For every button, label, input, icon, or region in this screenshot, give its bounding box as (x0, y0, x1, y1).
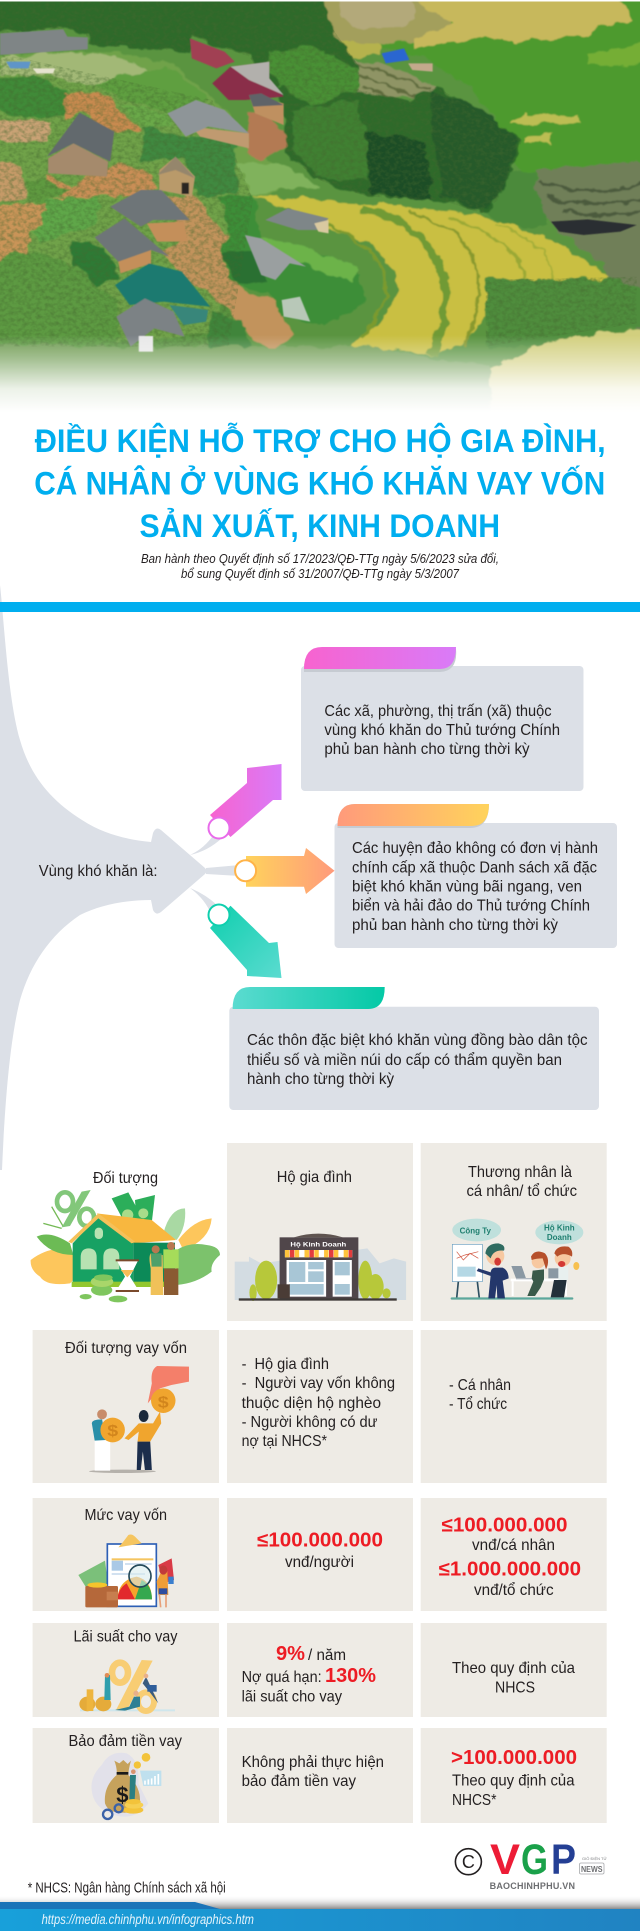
VGP logo: BAOCHINHPHU.VN (490, 1881, 575, 1891)
panel: huyện đảo: biển và hải đảo do Thủ tướng Chính (352, 897, 590, 915)
cell: loan recipients, trader: - Tổ chức (449, 1395, 507, 1413)
panel: thôn đặc biệt khó khăn: hành cho từng thời kỳ (247, 1071, 394, 1088)
cell: Không phải thực hiện: Không phải thực hiện (242, 1754, 384, 1771)
cell: ≤100.000.000 vnđ/người: vnđ/người (285, 1554, 354, 1571)
blue divider (0, 602, 640, 612)
icon: business people: Công Ty (460, 1226, 492, 1235)
table row 1: Đối tượng (31, 1170, 220, 1302)
cell: ≤100.000.000 / ≤1.000.000.000: ≤1.000.000.000 (439, 1559, 581, 1581)
cell: Theo quy định của NHCS (421, 1623, 607, 1717)
cell: >100.000.000: NHCS* (452, 1792, 496, 1809)
VGP logo (455, 1836, 607, 1891)
footer URL: https://media.chinhphu.vn/infographics.htm (42, 1912, 254, 1927)
hero photo: terraced rice fields and village (0, 0, 640, 447)
cell: ≤100.000.000 vnđ/người (227, 1498, 413, 1611)
background branching shape (0, 585, 206, 1170)
cell: ≤100.000.000 / ≤1.000.000.000: vnđ/tổ chức (474, 1581, 554, 1599)
cell: >100.000.000: >100.000.000 (451, 1747, 577, 1769)
panel: thôn đặc biệt khó khăn (229, 987, 599, 1110)
white fade at bottom of photo (0, 335, 640, 412)
cell: Lãi suất cho vay: Lãi suất cho vay (74, 1629, 178, 1646)
cell: Bảo đảm tiền vay: Bảo đảm tiền vay (68, 1733, 182, 1750)
icon: people exchanging coins (89, 1366, 189, 1473)
VGP logo: V (490, 1836, 520, 1884)
cell: ≤100.000.000 / ≤1.000.000.000 (421, 1498, 607, 1611)
cell: Không phải thực hiện (227, 1728, 413, 1823)
footnote: * NHCS: Ngân hàng Chính sách xã hội (28, 1881, 226, 1897)
cell: Mức vay vốn (33, 1498, 219, 1611)
icon: business people: Doanh (547, 1233, 572, 1242)
cell: Theo quy định của NHCS: Theo quy định của (452, 1660, 575, 1677)
cell: loan recipients, household: - Người vay vốn không (242, 1375, 395, 1392)
connectors from shape to arrows (190, 834, 240, 914)
VGP logo: P (551, 1836, 576, 1884)
cell: loan recipients, trader (421, 1330, 607, 1483)
panel: xã, phường, thị trấn (301, 647, 584, 791)
subtitle: Ban hành theo Quyết định số 17/2023/QĐ-TTg ngày 5/6/2023 sửa đổi, (141, 551, 499, 566)
icon: clipboard wallet gauge (78, 1534, 174, 1607)
panel: huyện đảo: biệt khó khăn vùng bãi ngang, ven (352, 879, 582, 896)
icon: business people (451, 1219, 583, 1300)
cell: Đối tượng vay vốn: Đối tượng vay vốn (65, 1340, 187, 1357)
cell: loan recipients, household: - Hộ gia đình (242, 1356, 329, 1373)
cell: Lãi suất cho vay (33, 1623, 219, 1717)
cell: Không phải thực hiện: bảo đảm tiền vay (242, 1773, 356, 1790)
cell: Theo quy định của NHCS: NHCS (495, 1680, 535, 1697)
panel: huyện đảo: Các huyện đảo không có đơn vị hành (352, 840, 598, 857)
cell: loan recipients, trader: - Cá nhân (449, 1377, 511, 1394)
cell: >100.000.000 (421, 1728, 607, 1823)
VGP logo: C (462, 1852, 475, 1872)
header cell: Đối tượng: Đối tượng (93, 1170, 158, 1187)
subtitle: bổ sung Quyết định số 31/2007/QĐ-TTg ngày 5/3/2007 (181, 566, 460, 581)
panel: xã, phường, thị trấn: Các xã, phường, thị trấn (xã) thuộc (324, 703, 552, 720)
cell: 9% / năm, nợ quá hạn 130%: / năm (308, 1647, 346, 1664)
cell: Hộ gia đình (227, 1143, 413, 1321)
panel: xã, phường, thị trấn: phủ ban hành cho từng thời kỳ (324, 741, 530, 758)
cell: 9% / năm, nợ quá hạn 130% (227, 1623, 413, 1717)
panel: huyện đảo: chính cấp xã thuộc Danh sách xã đặc (352, 860, 597, 876)
cell: Bảo đảm tiền vay (33, 1728, 219, 1823)
VGP logo: NEWS (581, 1864, 603, 1874)
footer bar (0, 1895, 640, 1931)
subtitle (141, 551, 499, 581)
icon: green house with money (31, 1190, 220, 1302)
arrow: green (208, 904, 282, 978)
panel: huyện đảo (334, 804, 617, 948)
icon: money bag with coins (91, 1753, 161, 1819)
title: SẢN XUẤT, KINH DOANH (140, 508, 500, 544)
cell: Thương nhân: Thương nhân là (468, 1164, 572, 1181)
VGP logo: G (521, 1836, 548, 1884)
cell: Thương nhân (421, 1143, 607, 1321)
icon: business people: Hộ Kinh (544, 1224, 575, 1233)
icon: money bag with coins: $ (116, 1783, 128, 1808)
icon: people exchanging coins: $ (107, 1422, 118, 1440)
tree texture (0, 0, 640, 353)
cell: loan recipients, household: thuộc diện hộ nghèo (242, 1395, 381, 1412)
village houses (0, 29, 637, 352)
cell: ≤100.000.000 / ≤1.000.000.000: ≤100.000.000 (442, 1515, 568, 1537)
title (34, 423, 606, 544)
icon: storefront Hộ Kinh Doanh: Hộ Kinh Doanh (290, 1242, 346, 1248)
arrow: pink (208, 764, 282, 838)
cell: loan recipients, household: - Người không có dư (242, 1414, 378, 1431)
icon: storefront Hộ Kinh Doanh (235, 1234, 406, 1301)
arrow: orange (235, 848, 334, 894)
icon: percent with coin bags (79, 1660, 175, 1711)
panel: thôn đặc biệt khó khăn: thiểu số và miền núi do cấp có thẩm quyền ban (247, 1051, 562, 1069)
cell: Hộ gia đình: Hộ gia đình (277, 1169, 352, 1186)
cell: 9% / năm, nợ quá hạn 130%: 9% (276, 1643, 305, 1665)
cell: 9% / năm, nợ quá hạn 130%: lãi suất cho vay (242, 1689, 342, 1706)
cell: ≤100.000.000 / ≤1.000.000.000: vnđ/cá nhân (472, 1537, 555, 1554)
cell: 9% / năm, nợ quá hạn 130%: Nợ quá hạn: (242, 1669, 322, 1686)
title: ĐIỀU KIỆN HỖ TRỢ CHO HỘ GIA ĐÌNH, (35, 423, 606, 459)
panel: xã, phường, thị trấn: vùng khó khăn do Thủ tướng Chính (324, 722, 560, 739)
cell: Đối tượng vay vốn (33, 1330, 219, 1483)
cell: >100.000.000: Theo quy định của (452, 1773, 575, 1790)
cell: 9% / năm, nợ quá hạn 130%: 130% (325, 1665, 376, 1687)
cell: loan recipients, household: nợ tại NHCS* (242, 1433, 327, 1450)
panel: thôn đặc biệt khó khăn: Các thôn đặc biệt khó khăn vùng đồng bào dân tộc (247, 1032, 588, 1049)
VGP logo: GIỎ ĐIỆN TỬ (582, 1856, 607, 1861)
icon: people exchanging coins: $ (158, 1393, 169, 1411)
cell: loan recipients, household (227, 1330, 413, 1483)
cell: ≤100.000.000 vnđ/người: ≤100.000.000 (257, 1530, 383, 1552)
cell: Thương nhân: cá nhân/ tổ chức (466, 1182, 577, 1200)
title: CÁ NHÂN Ở VÙNG KHÓ KHĂN VAY VỐN (34, 466, 605, 502)
panel: huyện đảo: phủ ban hành cho từng thời kỳ (352, 917, 558, 934)
label: Vùng khó khăn là: Vùng khó khăn là: (39, 863, 157, 880)
cell: Mức vay vốn: Mức vay vốn (84, 1507, 167, 1524)
